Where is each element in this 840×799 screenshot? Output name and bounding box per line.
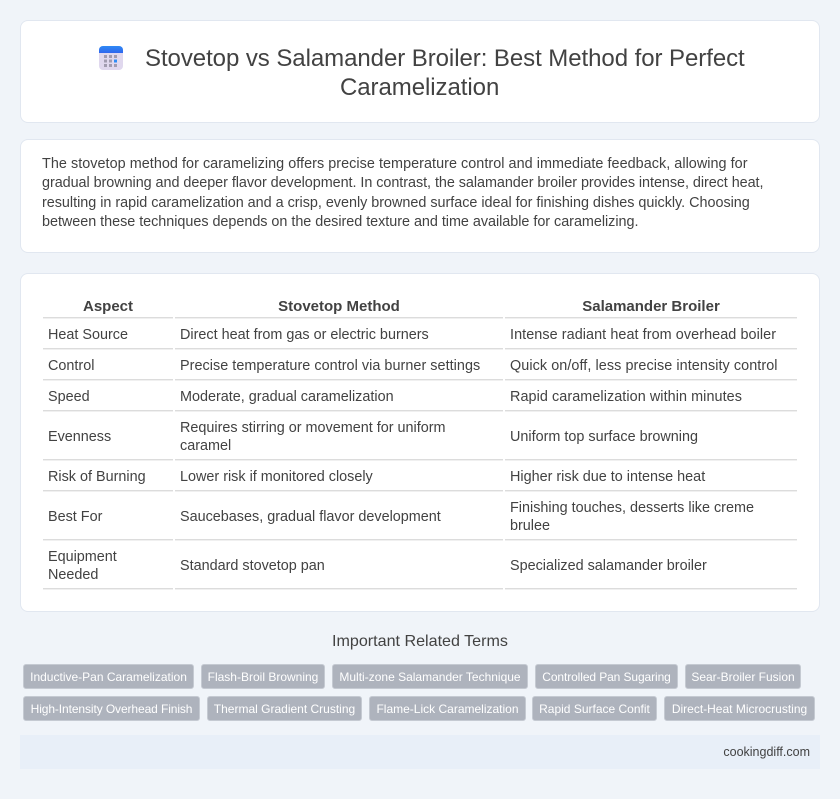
comparison table: Rapid caramelization within minutes	[510, 389, 742, 405]
related terms tags: Direct-Heat Microcrusting	[672, 702, 807, 716]
comparison table: Equipment	[48, 549, 117, 565]
title: Stovetop vs Salamander Broiler: Best Method for Perfect	[145, 45, 745, 72]
related terms tags: Sear-Broiler Fusion	[691, 670, 795, 684]
related terms tags: High-Intensity Overhead Finish	[31, 702, 192, 716]
intro text: between these techniques depends on the desired texture and time available for caramelizing.	[42, 214, 638, 230]
footer source: cookingdiff.com	[723, 745, 810, 759]
comparison table: Higher risk due to intense heat	[510, 469, 705, 485]
comparison table: Finishing touches, desserts like creme	[510, 500, 754, 516]
title	[145, 45, 745, 101]
comparison table: Specialized salamander broiler	[510, 558, 707, 574]
comparison table: Moderate, gradual caramelization	[180, 389, 394, 405]
title: Caramelization	[340, 74, 499, 101]
related terms tags: Multi-zone Salamander Technique	[339, 670, 521, 684]
footer bar	[20, 735, 820, 769]
comparison table: Lower risk if monitored closely	[180, 469, 373, 485]
related terms heading: Important Related Terms	[332, 632, 508, 650]
comparison table: Requires stirring or movement for uniform	[180, 420, 446, 436]
related terms tags	[23, 664, 815, 721]
comparison table	[43, 298, 797, 590]
related terms tags: Controlled Pan Sugaring	[542, 670, 671, 684]
header: Stovetop Method: Stovetop Method	[278, 298, 400, 315]
comparison table panel	[20, 273, 820, 612]
comparison table: caramel	[180, 438, 231, 454]
header card	[20, 20, 820, 123]
header: Aspect: Aspect	[83, 298, 133, 315]
intro panel	[20, 139, 820, 253]
comparison table: Best For	[48, 509, 102, 525]
intro text: The stovetop method for caramelizing offers precise temperature control and immediate feedback, allowing for	[42, 156, 748, 172]
comparison table: Evenness	[48, 429, 111, 445]
comparison table: Heat Source	[48, 327, 128, 343]
intro text: gradual browning and deeper flavor development. In contrast, the salamander broiler provides intense, direct heat,	[42, 175, 763, 191]
comparison table: Precise temperature control via burner settings	[180, 358, 480, 374]
icon: calendar	[99, 46, 123, 70]
comparison table: brulee	[510, 518, 550, 534]
comparison table: Quick on/off, less precise intensity control	[510, 358, 778, 374]
comparison table: Control	[48, 358, 94, 374]
intro text: resulting in rapid caramelization and a crisp, evenly browned surface ideal for finishing dishes quickly. Choosing	[42, 195, 750, 211]
comparison table: Standard stovetop pan	[180, 558, 325, 574]
header: Salamander Broiler: Salamander Broiler	[582, 298, 720, 315]
comparison table: Needed	[48, 567, 98, 583]
comparison table: Saucebases, gradual flavor development	[180, 509, 441, 525]
comparison table: Risk of Burning	[48, 469, 146, 485]
intro text	[42, 156, 763, 230]
comparison table: Uniform top surface browning	[510, 429, 698, 445]
comparison table: Intense radiant heat from overhead boiler	[510, 327, 776, 343]
related terms tags: Flame-Lick Caramelization	[376, 702, 519, 716]
related terms tags: Flash-Broil Browning	[208, 670, 318, 684]
related terms tags: Rapid Surface Confit	[539, 702, 650, 716]
related terms tags: Inductive-Pan Caramelization	[30, 670, 187, 684]
comparison table: Speed	[48, 389, 90, 405]
related terms tags: Thermal Gradient Crusting	[214, 702, 355, 716]
comparison table: Direct heat from gas or electric burners	[180, 327, 429, 343]
